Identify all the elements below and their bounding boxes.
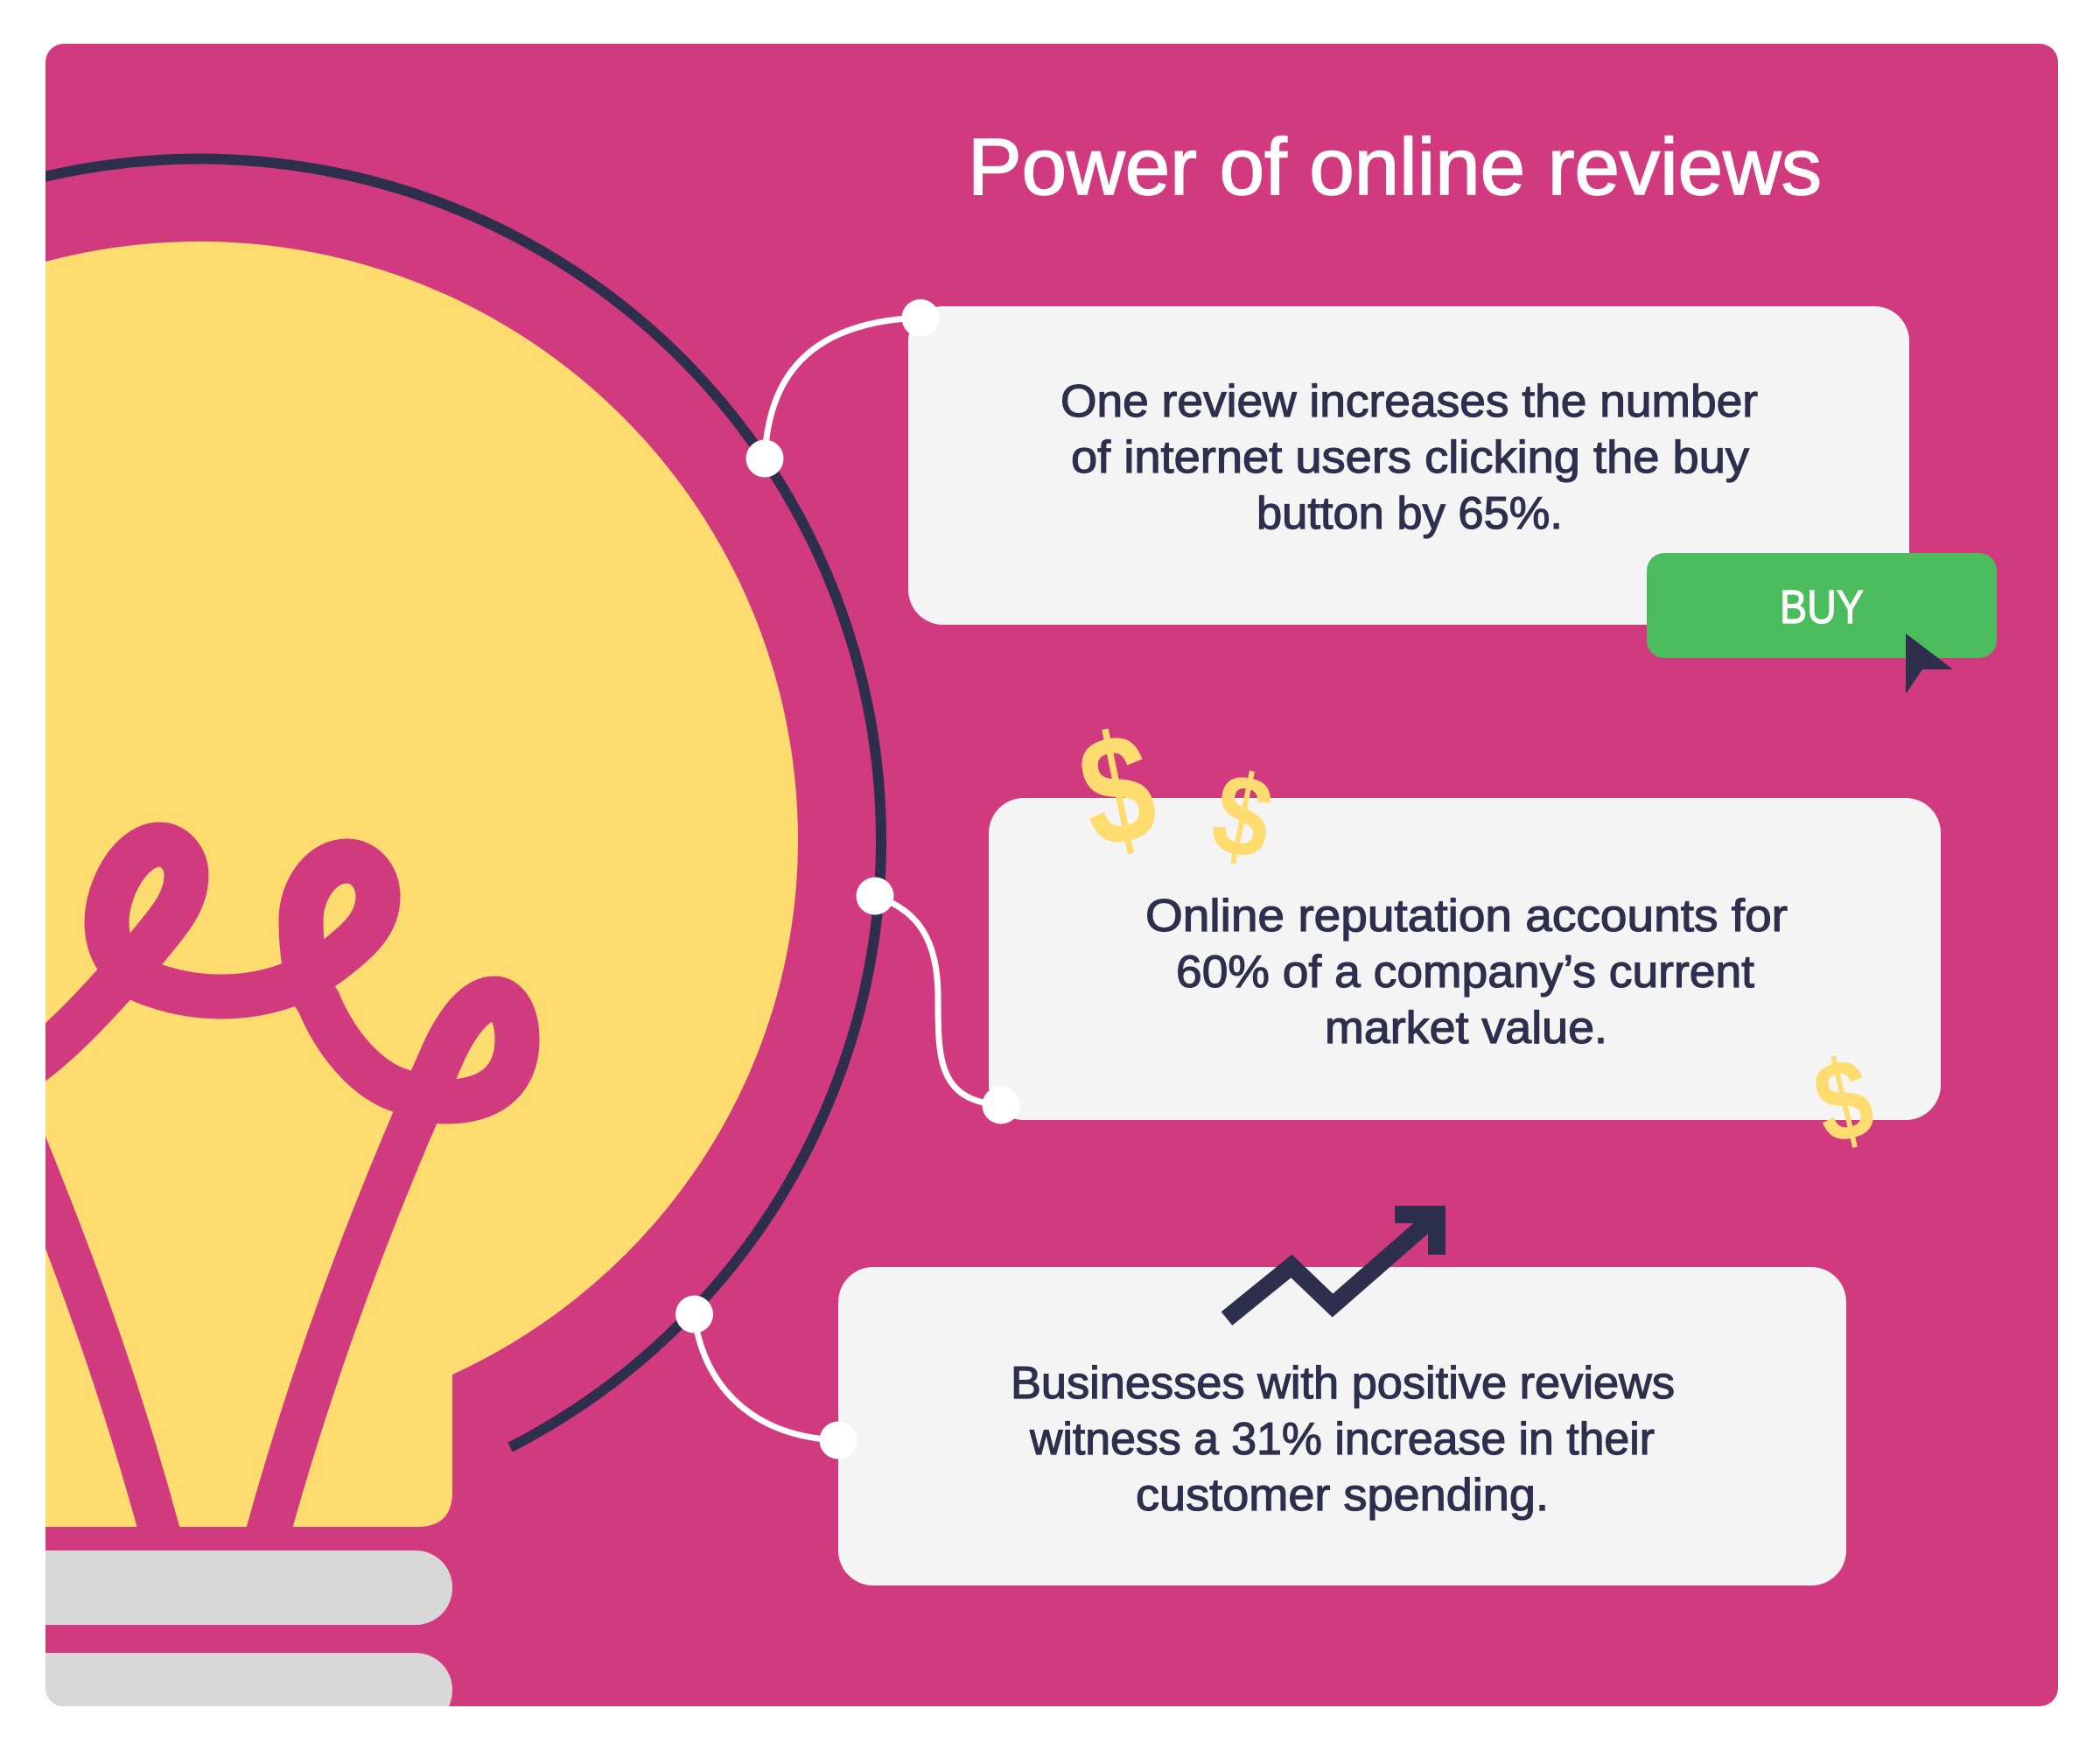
card 2 xyxy=(989,798,1941,1120)
card 3 text: Businesses with positive reviews xyxy=(1011,1358,1675,1409)
buy button: BUY xyxy=(1780,581,1864,634)
bulb base upper xyxy=(46,1550,452,1625)
card 3 xyxy=(838,1267,1846,1586)
icon: dollar sign on card corner: $ xyxy=(1802,1032,1885,1169)
card 3 text: witness a 31% increase in their xyxy=(1029,1414,1655,1465)
card 3 text xyxy=(1011,1358,1675,1521)
connector 3 xyxy=(676,1295,858,1460)
card 1 text xyxy=(1060,376,1758,539)
card 2 text xyxy=(1145,891,1788,1054)
buy button xyxy=(1647,553,1997,658)
connector 2 xyxy=(856,877,1020,1124)
filament left leg xyxy=(26,1144,162,1540)
card 3 text: customer spending. xyxy=(1136,1470,1549,1521)
illustration: light bulb xyxy=(0,159,881,1727)
card 1 text: of internet users clicking the buy xyxy=(1071,432,1749,483)
icon: mouse cursor xyxy=(1906,634,1953,694)
filament spiral xyxy=(26,844,517,1540)
outer halo arc xyxy=(0,159,881,1447)
icon: small dollar sign: $ xyxy=(1202,748,1283,886)
bulb glass xyxy=(0,242,798,1527)
card 1 xyxy=(908,306,1909,625)
bulb base lower xyxy=(46,1653,452,1706)
icon: large dollar sign: $ xyxy=(1066,698,1169,883)
card 1 text: button by 65%. xyxy=(1256,488,1563,539)
card 2 text: 60% of a company’s current xyxy=(1176,947,1755,998)
card 3 background xyxy=(838,1267,1846,1586)
card 2 text: Online reputation accounts for xyxy=(1145,891,1788,942)
connector 1 xyxy=(746,299,940,478)
icon: growth arrow xyxy=(1227,1206,1446,1319)
card 2 background xyxy=(989,798,1941,1120)
card 2 text: market value. xyxy=(1325,1003,1607,1054)
title: Power of online reviews xyxy=(968,122,1822,212)
card 1 background xyxy=(908,306,1909,625)
card 1 text: One review increases the number xyxy=(1060,376,1758,427)
